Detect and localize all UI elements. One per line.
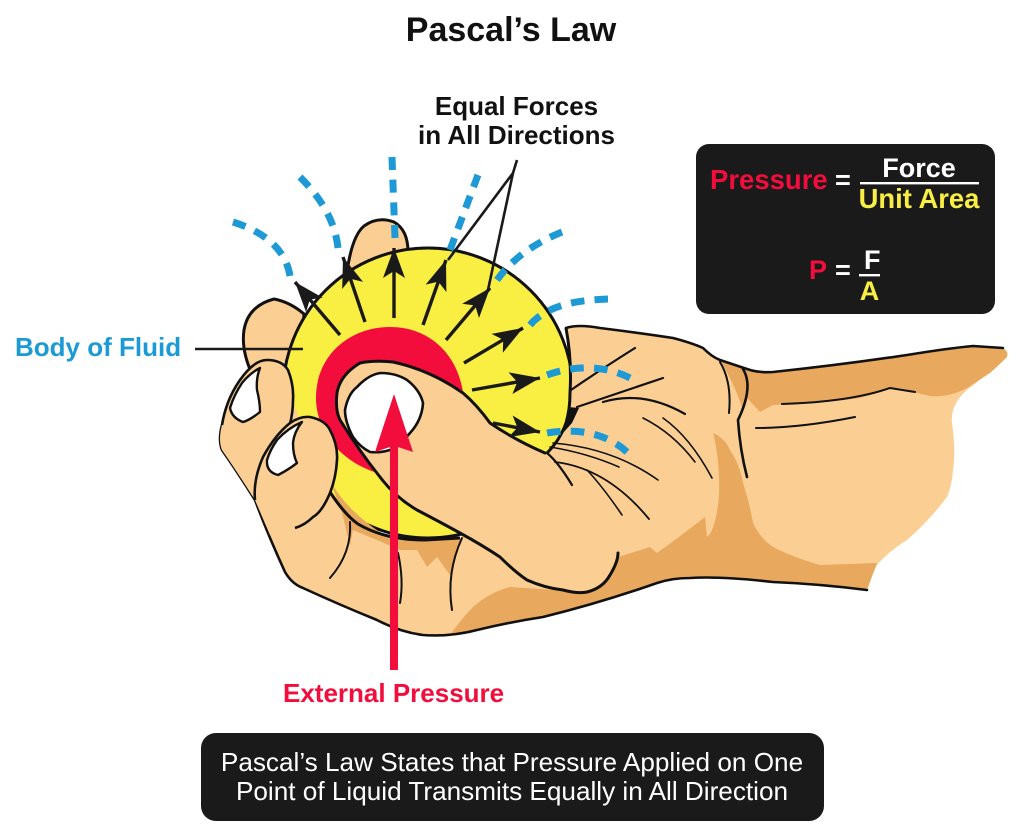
- formula panel: =: [835, 255, 851, 285]
- pressure crescent: [316, 327, 463, 473]
- label: body of fluid: Body of Fluid: [15, 332, 181, 362]
- ball edge over the palm: [330, 328, 570, 540]
- formula panel: A: [860, 276, 879, 306]
- shadow along the lower hand and wrist: [450, 433, 877, 635]
- second curled finger: [255, 417, 337, 560]
- palm and forearm skin: [220, 326, 1007, 635]
- black force arrows: [295, 248, 540, 432]
- label: equal forces: [418, 91, 615, 150]
- formula panel: Pressure: [710, 164, 828, 195]
- first finger nail: [230, 368, 260, 422]
- formula panel: P: [809, 255, 827, 285]
- definition callout: Point of Liquid Transmits Equally in All Direction: [236, 776, 788, 806]
- leader lines to force arrows: [448, 160, 517, 290]
- ball of fluid: [283, 248, 573, 538]
- back fingers behind the ball: [243, 220, 408, 380]
- dark fold beside the ball: [563, 407, 579, 433]
- blue dashed force paths: [233, 157, 630, 452]
- leader line to body of fluid: [195, 348, 303, 350]
- formula panel: F: [864, 245, 880, 275]
- label: external pressure: External Pressure: [283, 678, 504, 708]
- definition callout: [201, 733, 824, 821]
- label: equal forces: Equal Forces: [435, 91, 598, 121]
- shadow along the top of the forearm: [720, 346, 1007, 412]
- title: Pascal’s Law: [406, 11, 617, 49]
- hand outline: [220, 326, 1003, 635]
- hand creases: [330, 348, 915, 610]
- formula panel: =: [835, 165, 851, 195]
- thumb outline: [336, 361, 618, 593]
- first curled finger: [220, 360, 300, 500]
- illustration: hand squeezing a ball of fluid: [220, 157, 1007, 635]
- formula panel: Unit Area: [859, 183, 980, 214]
- formula panel: [696, 144, 995, 314]
- arrow: external pressure: [375, 394, 413, 670]
- thumb nail: [345, 373, 423, 452]
- formula panel: Force: [882, 153, 956, 183]
- thumb: [336, 361, 660, 593]
- definition callout: Pascal’s Law States that Pressure Applied on One: [221, 747, 803, 777]
- label: equal forces: in All Directions: [418, 120, 615, 150]
- second finger nail: [267, 422, 302, 475]
- shadow under the ball: [330, 480, 462, 575]
